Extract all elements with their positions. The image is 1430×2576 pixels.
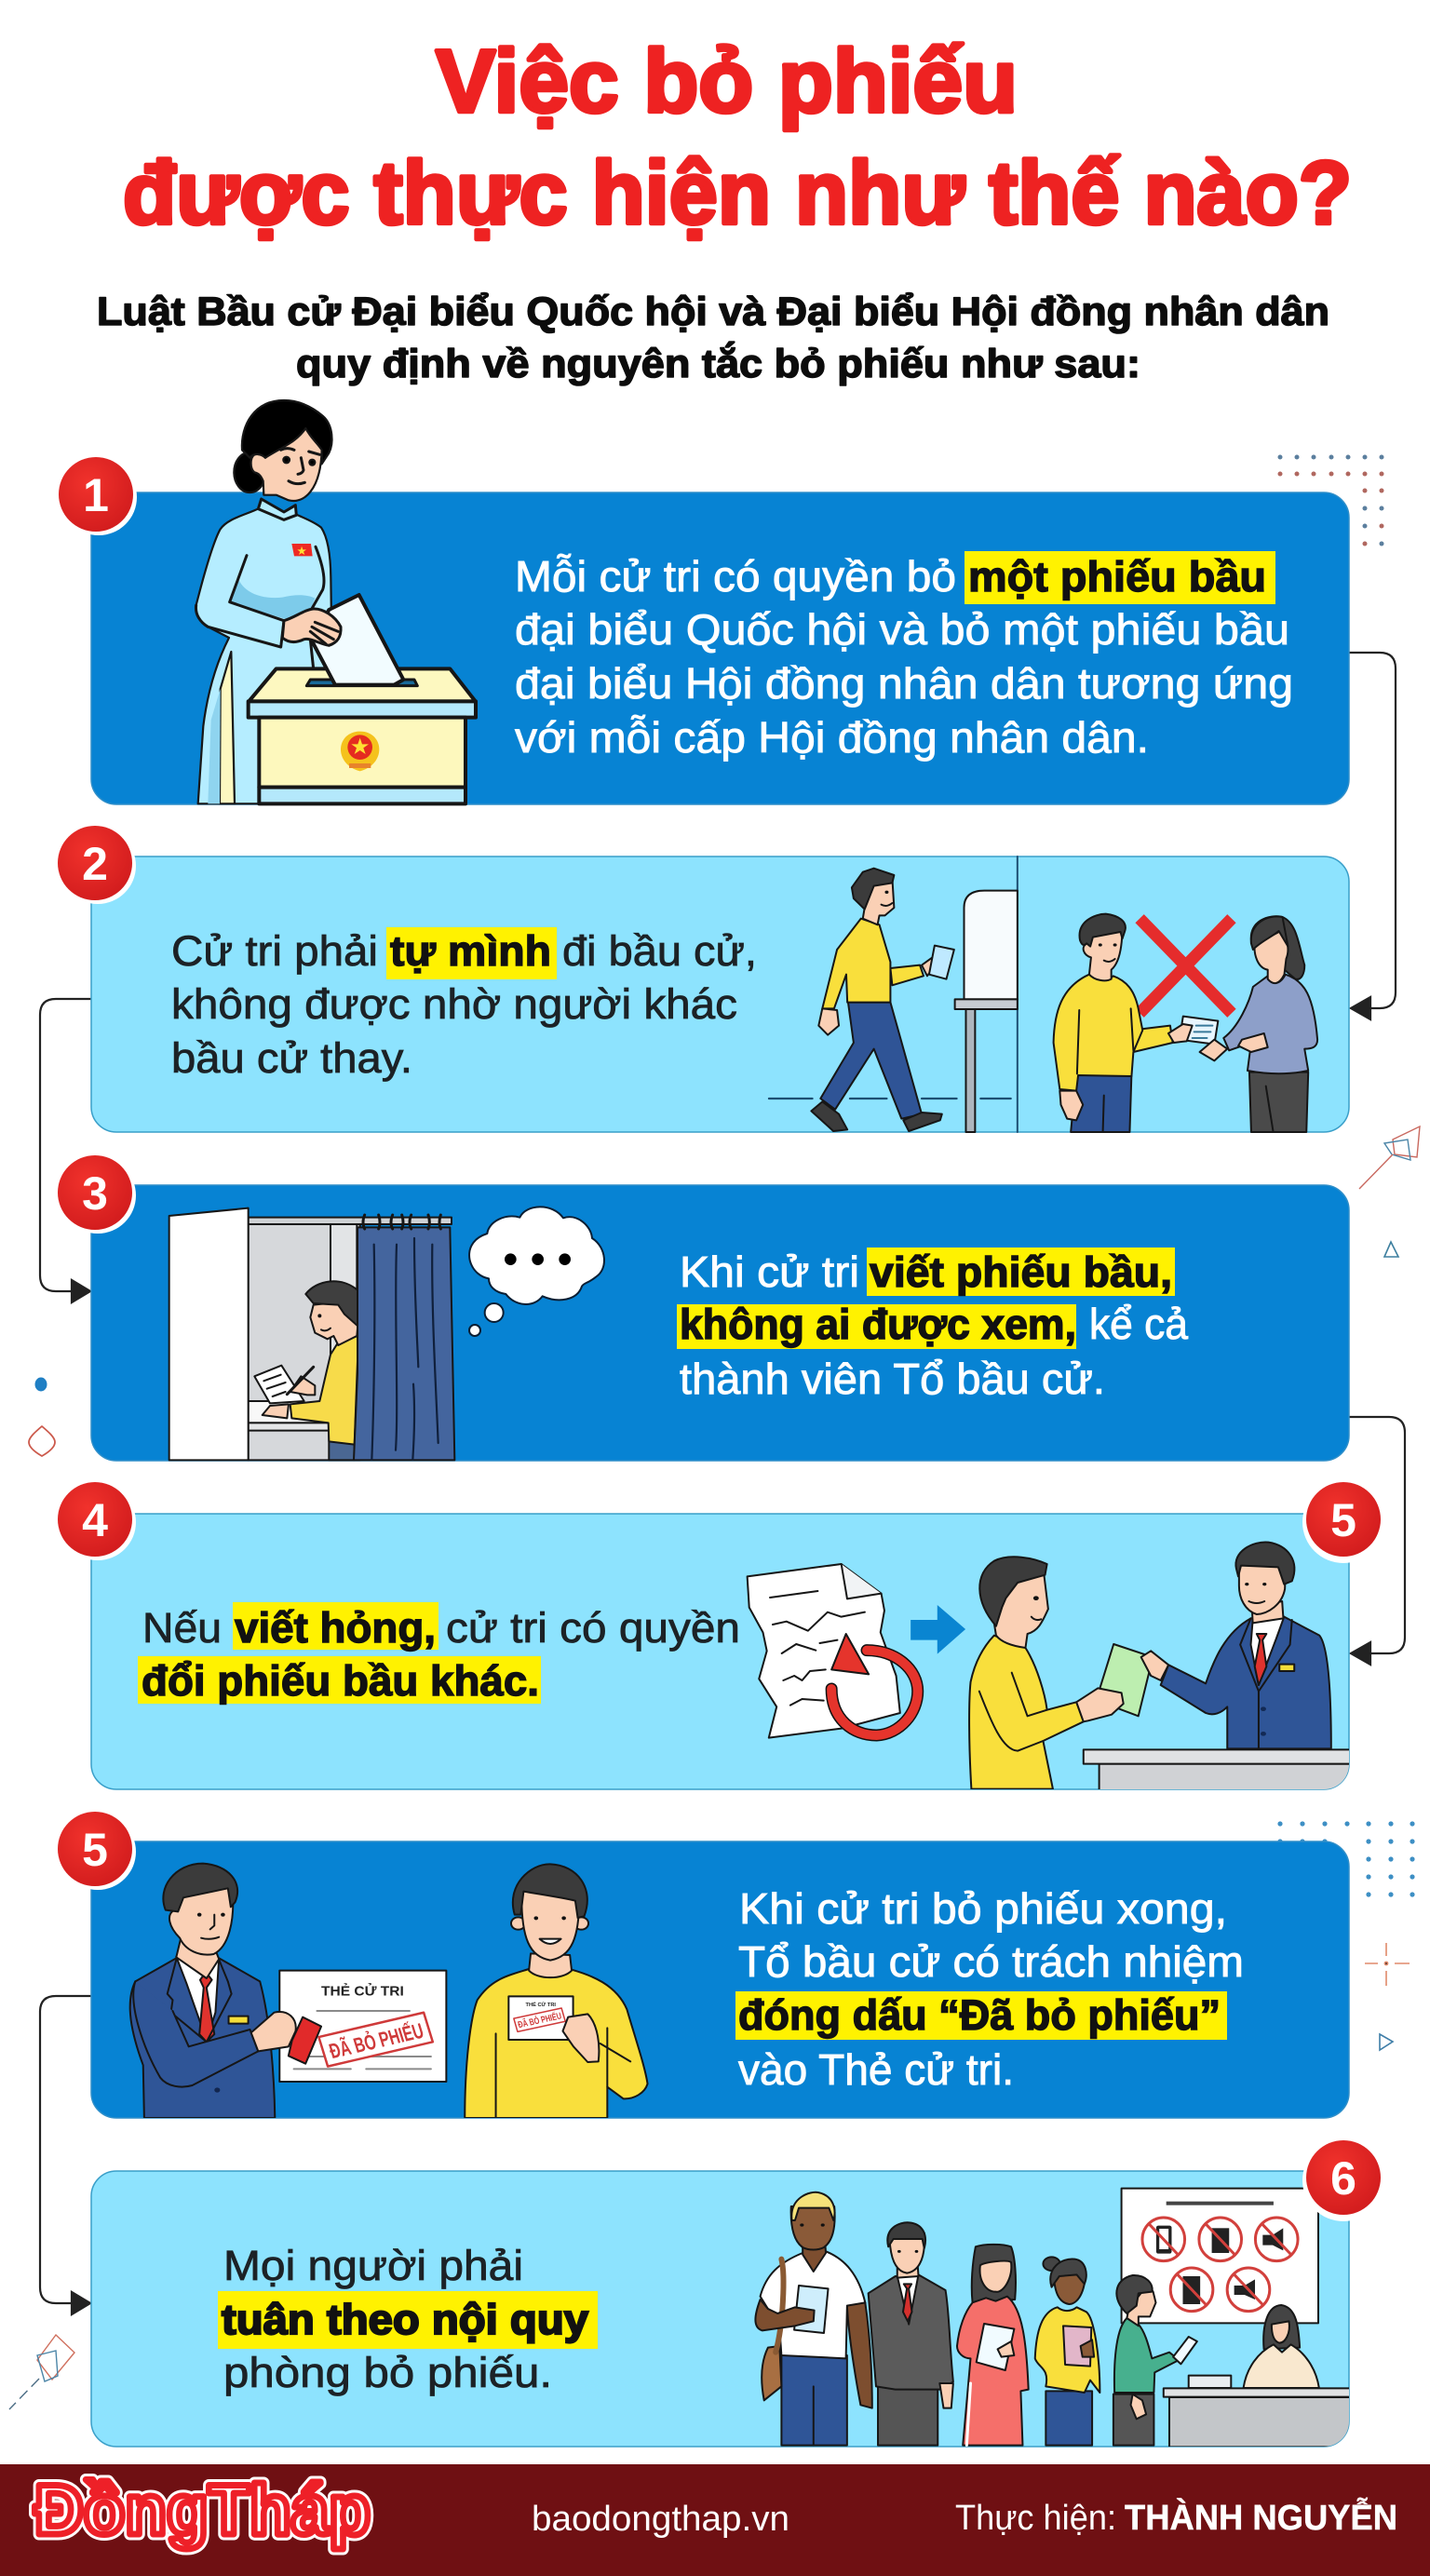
- highlight: [965, 551, 1275, 604]
- footer background: [0, 2464, 1430, 2576]
- icon: national emblem: [341, 732, 379, 771]
- logo: ĐồngTháp: [34, 2471, 371, 2550]
- text step 2: [171, 927, 757, 1082]
- panel 4 background: [91, 1514, 1349, 1789]
- text step 3: thành viên Tổ bầu cử.: [680, 1355, 1105, 1403]
- badge 5 right: 5: [1330, 1494, 1356, 1546]
- person 1: [755, 2192, 872, 2446]
- text step 5: đóng dấu “Đã bỏ phiếu”: [738, 1991, 1221, 2039]
- text step 1: đại biểu Quốc hội và bỏ một phiếu bầu: [515, 605, 1289, 654]
- badge 5 left: 5: [82, 1824, 108, 1876]
- badge 5 left: [58, 1812, 136, 1890]
- card held by voter: [508, 1996, 573, 2040]
- illustration: voter writing ballot in private booth: [169, 1207, 604, 1460]
- decorative dots top right: [1277, 454, 1383, 546]
- icon: paper plane right: [1359, 1126, 1420, 1189]
- highlight: [735, 1991, 1227, 2040]
- credit: THÀNH NGUYỄN: [1125, 2497, 1397, 2538]
- badge 2: [58, 826, 136, 904]
- icon: blue arrow: [911, 1605, 965, 1654]
- panel 1 background: [91, 492, 1349, 804]
- text step 3: kể cả: [1089, 1300, 1188, 1348]
- title: được thực hiện như thế nào?: [123, 143, 1352, 243]
- credit: [955, 2497, 1397, 2538]
- title: Việc bỏ phiếu: [436, 32, 1018, 131]
- connector: step 3 to step 4: [1349, 1417, 1405, 1665]
- text step 5: vào Thẻ cử tri.: [738, 2045, 1014, 2094]
- badge 3: [58, 1155, 136, 1234]
- highlight: [386, 927, 557, 979]
- badge 6: 6: [1330, 2152, 1356, 2205]
- text step 4: [138, 1602, 740, 1705]
- text step 4: đổi phiếu bầu khác.: [142, 1657, 539, 1705]
- highlight: [138, 1656, 541, 1704]
- icon: triangle step 5: [1380, 2034, 1393, 2050]
- connector: step 5 to step 6: [40, 1996, 91, 2314]
- badge 4: [58, 1482, 136, 1560]
- icon: red return arrow: [831, 1651, 918, 1735]
- text step 1: Mỗi cử tri có quyền bỏ: [515, 552, 956, 600]
- text step 3: Khi cử tri: [680, 1248, 859, 1296]
- highlight: [677, 1304, 1076, 1349]
- badge 6: [1302, 2139, 1384, 2221]
- card: Thẻ cử tri: THẺ CỬ TRI: [321, 1983, 404, 1999]
- panel 3: [91, 1185, 1349, 1461]
- credit: Thực hiện:: [955, 2499, 1116, 2538]
- illustration: woman casting ballot: [196, 400, 476, 803]
- badge 2: 2: [82, 838, 108, 890]
- text step 3: viết phiếu bầu,: [870, 1248, 1172, 1296]
- website: baodongthap.vn: [532, 2500, 789, 2539]
- card: Thẻ cử tri: ĐÃ BỎ PHIẾU: [326, 2017, 426, 2064]
- icon: red diamond left: [29, 1426, 55, 1456]
- logo: ĐồngTháp: [34, 2471, 371, 2550]
- rules board: [1122, 2189, 1318, 2323]
- icon: blue dot left: [35, 1378, 47, 1391]
- highlight: [218, 2291, 598, 2349]
- subtitle: [97, 290, 1329, 386]
- text step 4: cử tri có quyền: [446, 1604, 740, 1652]
- panel 5: [91, 1841, 1349, 2118]
- text step 2: tự mình: [390, 927, 551, 975]
- icon: red X: [1140, 919, 1232, 1013]
- person 3: [957, 2245, 1029, 2446]
- text step 1: với mỗi cấp Hội đồng nhân dân.: [515, 713, 1149, 762]
- text step 3: không ai được xem,: [680, 1301, 1076, 1348]
- text step 1: đại biểu Hội đồng nhân dân tương ứng: [515, 659, 1293, 708]
- panel 3 background: [91, 1185, 1349, 1461]
- panel 6: [91, 2171, 1355, 2447]
- text step 2: bầu cử thay.: [171, 1034, 412, 1082]
- badge 4: 4: [82, 1494, 108, 1546]
- receptionist: [1164, 2305, 1355, 2447]
- panel 1: [91, 400, 1349, 804]
- icon: triangle right: [1384, 1242, 1398, 1257]
- text step 5: Tổ bầu cử có trách nhiệm: [738, 1937, 1244, 1986]
- connector: step 2 to step 3: [40, 999, 91, 1302]
- text step 2: Cử tri phải: [171, 927, 378, 975]
- title: [123, 32, 1352, 243]
- subtitle: quy định về nguyên tắc bỏ phiếu như sau:: [296, 341, 1140, 386]
- panel 6 background: [91, 2171, 1349, 2447]
- connector: step 1 to step 2: [1349, 653, 1396, 1019]
- icon: crumpled ballot: [748, 1564, 900, 1738]
- illustration: official stamps voter card: [130, 1864, 648, 2118]
- illustration: people queuing by rules board: [755, 2189, 1355, 2447]
- text step 3: [677, 1248, 1188, 1403]
- text step 6: Mọi người phải: [223, 2242, 523, 2289]
- panel 4: [91, 1514, 1357, 1792]
- badge 3: 3: [82, 1167, 108, 1220]
- icon: paper plane left: [9, 2335, 74, 2409]
- badge 1: [59, 457, 137, 535]
- text step 1: một phiếu bầu: [968, 553, 1266, 600]
- badge 5 right: [1302, 1481, 1384, 1563]
- text step 2: đi bầu cử,: [562, 927, 757, 975]
- panel 5 background: [91, 1841, 1349, 2118]
- panel 2: [91, 856, 1349, 1132]
- text step 6: [218, 2242, 598, 2396]
- illustration: spoiled ballot exchanged: [748, 1543, 1357, 1792]
- text step 1: [515, 551, 1293, 762]
- person 4: [1035, 2257, 1099, 2446]
- panel 2 background: [91, 856, 1349, 1132]
- text step 6: tuân theo nội quy: [222, 2296, 588, 2343]
- text step 5: [735, 1884, 1244, 2094]
- subtitle: Luật Bầu cử Đại biểu Quốc hội và Đại biểu Hội đồng nhân dân: [97, 290, 1329, 334]
- badge 1: 1: [83, 469, 109, 521]
- text step 4: viết hỏng,: [235, 1604, 436, 1652]
- highlight: [233, 1602, 438, 1650]
- card held by voter: THẺ CỬ TRI: [525, 2002, 556, 2008]
- person 2: [869, 2222, 953, 2446]
- text step 4: Nếu: [142, 1604, 222, 1652]
- text step 2: không được nhờ người khác: [171, 980, 737, 1028]
- text step 6: phòng bỏ phiếu.: [223, 2349, 552, 2396]
- icon: cross mark right: [1365, 1943, 1410, 1986]
- card held by voter: ĐÃ BỎ PHIẾU: [517, 2010, 563, 2030]
- icon: thought bubble: [469, 1207, 604, 1304]
- text step 5: Khi cử tri bỏ phiếu xong,: [739, 1884, 1227, 1933]
- decorative dots step 5: [1277, 1821, 1415, 1897]
- footer: [0, 2464, 1430, 2576]
- illustration: voter walks to booth and no proxy voting: [769, 856, 1317, 1132]
- highlight: [867, 1248, 1175, 1296]
- card: Thẻ cử tri: [279, 1971, 446, 2082]
- person 5: [1113, 2275, 1197, 2446]
